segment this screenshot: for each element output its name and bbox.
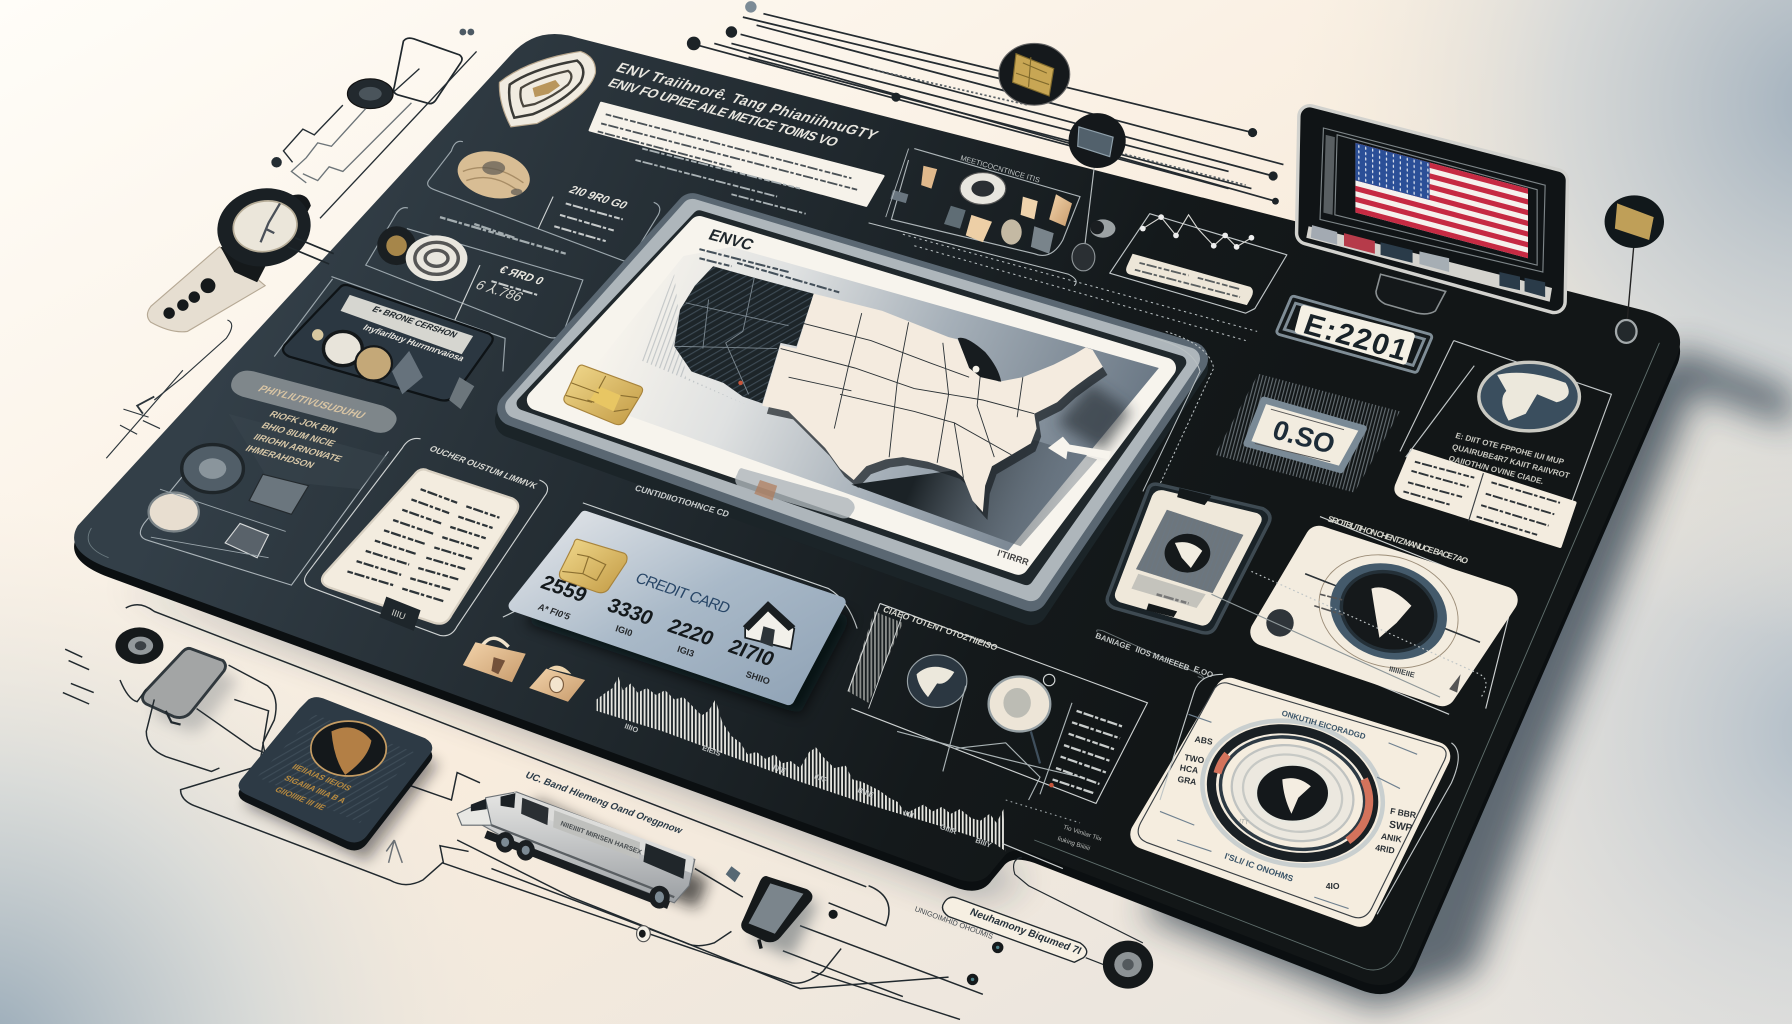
gauge labels: TWO — [1184, 752, 1205, 765]
gauge labels: I'SLI/ IC ONOHMS — [1223, 851, 1295, 884]
card chip — [559, 539, 627, 593]
card small labels: A* FI0'5 — [536, 602, 572, 622]
panel: tan blob: 2I0 9R0 G0 — [566, 183, 631, 212]
target rings — [1304, 537, 1473, 685]
icon: small coin top left — [347, 79, 393, 109]
chart axis labels: EIEIS — [701, 743, 722, 758]
chip value box 0.SO: 0.SO — [1269, 414, 1339, 460]
gauge labels — [1177, 734, 1418, 891]
tablet frame — [512, 217, 1191, 608]
truck illustration — [457, 792, 709, 909]
icon: bottom phone — [741, 876, 818, 958]
panel heading: CIAEO TOTENT OTOZTIIEISO — [881, 604, 1000, 652]
shield emblem — [499, 51, 596, 127]
gauge labels: ANIK — [1380, 831, 1403, 845]
labels row under phone: E.OO — [1192, 664, 1214, 680]
truck heading text: UC. Band Hiemeng Oand Oregpnow — [523, 770, 685, 836]
icon: padlock small — [529, 666, 585, 702]
left lines and ticks — [106, 320, 232, 458]
bottom right note text — [1057, 818, 1249, 852]
monitor bottom bar — [1306, 226, 1552, 302]
panel: camera target: IIIIIIEIIE — [1388, 664, 1416, 680]
small left device outline — [394, 29, 474, 104]
circuit lines top left — [272, 51, 477, 218]
waveform chart — [597, 677, 1080, 869]
panel: rings: 6 ⅄.786 — [472, 278, 526, 305]
central tablet — [512, 210, 1191, 608]
section outline — [503, 503, 857, 629]
icon: padlock tan — [463, 638, 526, 682]
chip value box 0.SO — [1215, 374, 1400, 493]
house icon — [745, 603, 794, 649]
intro microtext — [635, 149, 806, 214]
panel: network chart — [1110, 214, 1287, 313]
section heading: CUNTIDIIOTIOHNCE CD — [633, 483, 731, 519]
badge card with fist emblem — [239, 697, 439, 861]
panel: translucent device: BHIO 8IUM NICIE — [259, 421, 338, 449]
icon: right pin chip — [1605, 195, 1664, 343]
bottom label pill: Neuhamony Biqumed 7I — [968, 907, 1083, 957]
icon: small ribbon — [386, 840, 402, 863]
credit card section: IGI3 — [676, 644, 695, 659]
flag — [1355, 143, 1528, 258]
card title: CREDIT CARD — [632, 570, 733, 617]
cream card — [1264, 539, 1504, 693]
panel: cream data table — [1396, 450, 1575, 546]
chart axis labels: GIIIR — [939, 822, 959, 837]
gauge labels: GRA — [1177, 774, 1197, 787]
panel: globe and list — [848, 603, 1147, 803]
panel: globe info: E: DIIT OTE FPPOHE IUI MUP — [1454, 431, 1566, 467]
board dotted lines — [1160, 366, 1486, 914]
icon: node dots bottom — [637, 866, 1003, 985]
panel: globe info: OAIIOTH/N OVINE CIADE. — [1447, 454, 1545, 486]
icon: bottom left coin — [115, 627, 163, 664]
panel: globe info: QUAIRUBE4R7 KAIIT RAIIVROT — [1451, 443, 1571, 480]
chart axis labels: IIIIE — [772, 763, 787, 776]
icon: wristwatch — [147, 181, 334, 332]
gauge labels: F BBR — [1389, 806, 1418, 820]
icon: pin badge with stem — [1069, 113, 1126, 271]
panel: globe info — [1400, 341, 1611, 503]
credit card section: IGI0 — [614, 623, 634, 638]
magnifier circle — [989, 677, 1050, 731]
title text: ENV Traiihnorê. Tang PhianiihnuGTY — [612, 61, 881, 143]
panel: drone card — [274, 277, 505, 409]
credit card section: SHIIO — [744, 669, 771, 687]
screen microtext — [699, 249, 840, 293]
bezel small text: I'TIRRR — [996, 548, 1030, 568]
labels row under phone: BANIAGE — [1094, 631, 1133, 652]
translucent bottom pill — [735, 468, 855, 518]
credit card section: 2220 — [664, 615, 718, 650]
decorative top lines with dots — [699, 14, 1283, 201]
panel: notes sheet — [305, 438, 548, 636]
icon: chip badge top — [999, 43, 1070, 105]
side strip — [1323, 135, 1335, 215]
chart axis labels: IIIIF — [813, 772, 829, 785]
credit card body — [514, 517, 840, 699]
USA map east — [762, 294, 1107, 520]
panel: rings — [366, 208, 583, 338]
gauge rings — [1186, 701, 1399, 885]
panel: icon grid — [886, 149, 1080, 255]
left screen hatch — [640, 274, 749, 406]
gauge heading: ONKUTIH EICORADGD — [1281, 709, 1367, 741]
panel: tan blob — [428, 141, 660, 261]
globe — [907, 655, 967, 707]
brand text: ENVC — [706, 226, 757, 254]
gauge labels: ABS — [1194, 734, 1214, 747]
translucent pill label: PHIYLIUTIVUSUDUHU — [255, 384, 368, 421]
title text: ENIV FO UPIEE AILE METICE TOIMS VO — [605, 76, 842, 149]
chart axis labels — [623, 721, 993, 850]
line node dots — [687, 1, 1279, 205]
list text — [1053, 711, 1123, 793]
panel: translucent device: IHMERAHDSON — [243, 444, 317, 471]
panel: camera target — [1257, 514, 1514, 714]
panel: notes sheet: IIIU — [390, 607, 407, 622]
panel: rings: € ЯRD 0 — [496, 263, 547, 287]
board shadow — [114, 349, 1792, 1008]
gauge labels: 4IO — [1326, 881, 1340, 891]
badge card with fist emblem: SIGAIIIA IIIIA B A — [282, 773, 348, 805]
gauge labels: SWP — [1388, 820, 1413, 834]
translucent pill label — [231, 371, 397, 433]
heading: SROTBUTIH ON CHENTZ MANUCE BACE 7 AO — [1326, 514, 1470, 566]
card shadow — [526, 531, 851, 714]
panel: translucent device — [140, 410, 389, 585]
bottom right note text: Iiuking Biiiiiii — [1057, 835, 1091, 852]
bottom right note text: ITT — [1239, 818, 1249, 826]
icon: bottom right coin — [1086, 941, 1153, 989]
gauge labels: HCA — [1179, 762, 1199, 775]
gauge labels: 4RID — [1375, 842, 1395, 856]
badge card with fist emblem: IIEIIAIAS IIEIOIS — [290, 762, 354, 793]
panel: notes sheet: OUCHER OUSTUM LIMMVK — [427, 444, 540, 491]
gauge card — [1145, 693, 1435, 912]
EMV chip — [564, 365, 643, 425]
panel: radial gauge — [1138, 683, 1446, 918]
panel: translucent device: RIOFK JOK BIN — [267, 410, 340, 436]
labels row under phone: IIOS MAIIEEEB — [1134, 645, 1191, 673]
icon: bottom left device — [143, 648, 236, 732]
intro white strip — [590, 103, 883, 206]
chart axis labels: IIIIO — [623, 721, 640, 735]
bottom label pill: UNIGOIMHID OHOUMIS — [914, 904, 994, 941]
panel: drone card: Inyfiarlbuy Hurrnnrvaiosa — [361, 323, 468, 363]
USA map west — [674, 266, 814, 403]
chart axis labels: BIIIY — [974, 836, 993, 850]
panel: drone card: E• BRONE CERSHON — [370, 305, 460, 339]
tablet white bezel — [537, 226, 1166, 565]
truck illustration: NIIEIIIIT MIRISEN HARSEX — [559, 820, 643, 857]
monitor body — [1307, 117, 1557, 302]
chart axis labels: IIIII — [902, 808, 915, 820]
credit card section — [503, 483, 857, 714]
bottom left circuit lines — [63, 605, 983, 1019]
bottom label pill — [914, 857, 1143, 962]
code badge E:2201 — [1280, 299, 1429, 369]
panel: icon grid: MEETICOCNTINCE ITIS — [959, 153, 1041, 185]
flow lines beside tablet — [869, 223, 1257, 491]
white arrow — [1048, 437, 1111, 459]
labels row under phone — [1094, 630, 1214, 680]
monitor with US flag — [1306, 117, 1557, 314]
credit card section: 2I7I0 — [725, 635, 778, 671]
card numbers: 2559 — [537, 571, 591, 607]
credit card section: 3330 — [603, 594, 657, 630]
phone mockup — [1107, 484, 1270, 633]
panel: translucent device: IIRIOHN ARNOWATE — [251, 432, 345, 465]
monitor stand — [1376, 274, 1446, 314]
badge card with fist emblem: GIIOIIIIE III IIE — [273, 785, 329, 812]
chart axis labels: BIIIE — [856, 785, 875, 800]
map shadow wedge — [851, 440, 1097, 546]
hatch wedge — [1057, 383, 1131, 451]
bottom right note text: Tio Viiniiar Tiix — [1062, 824, 1103, 843]
tablet screen — [571, 247, 1159, 551]
code badge E:2201: E:2201 — [1299, 308, 1412, 367]
server bars — [848, 611, 903, 703]
